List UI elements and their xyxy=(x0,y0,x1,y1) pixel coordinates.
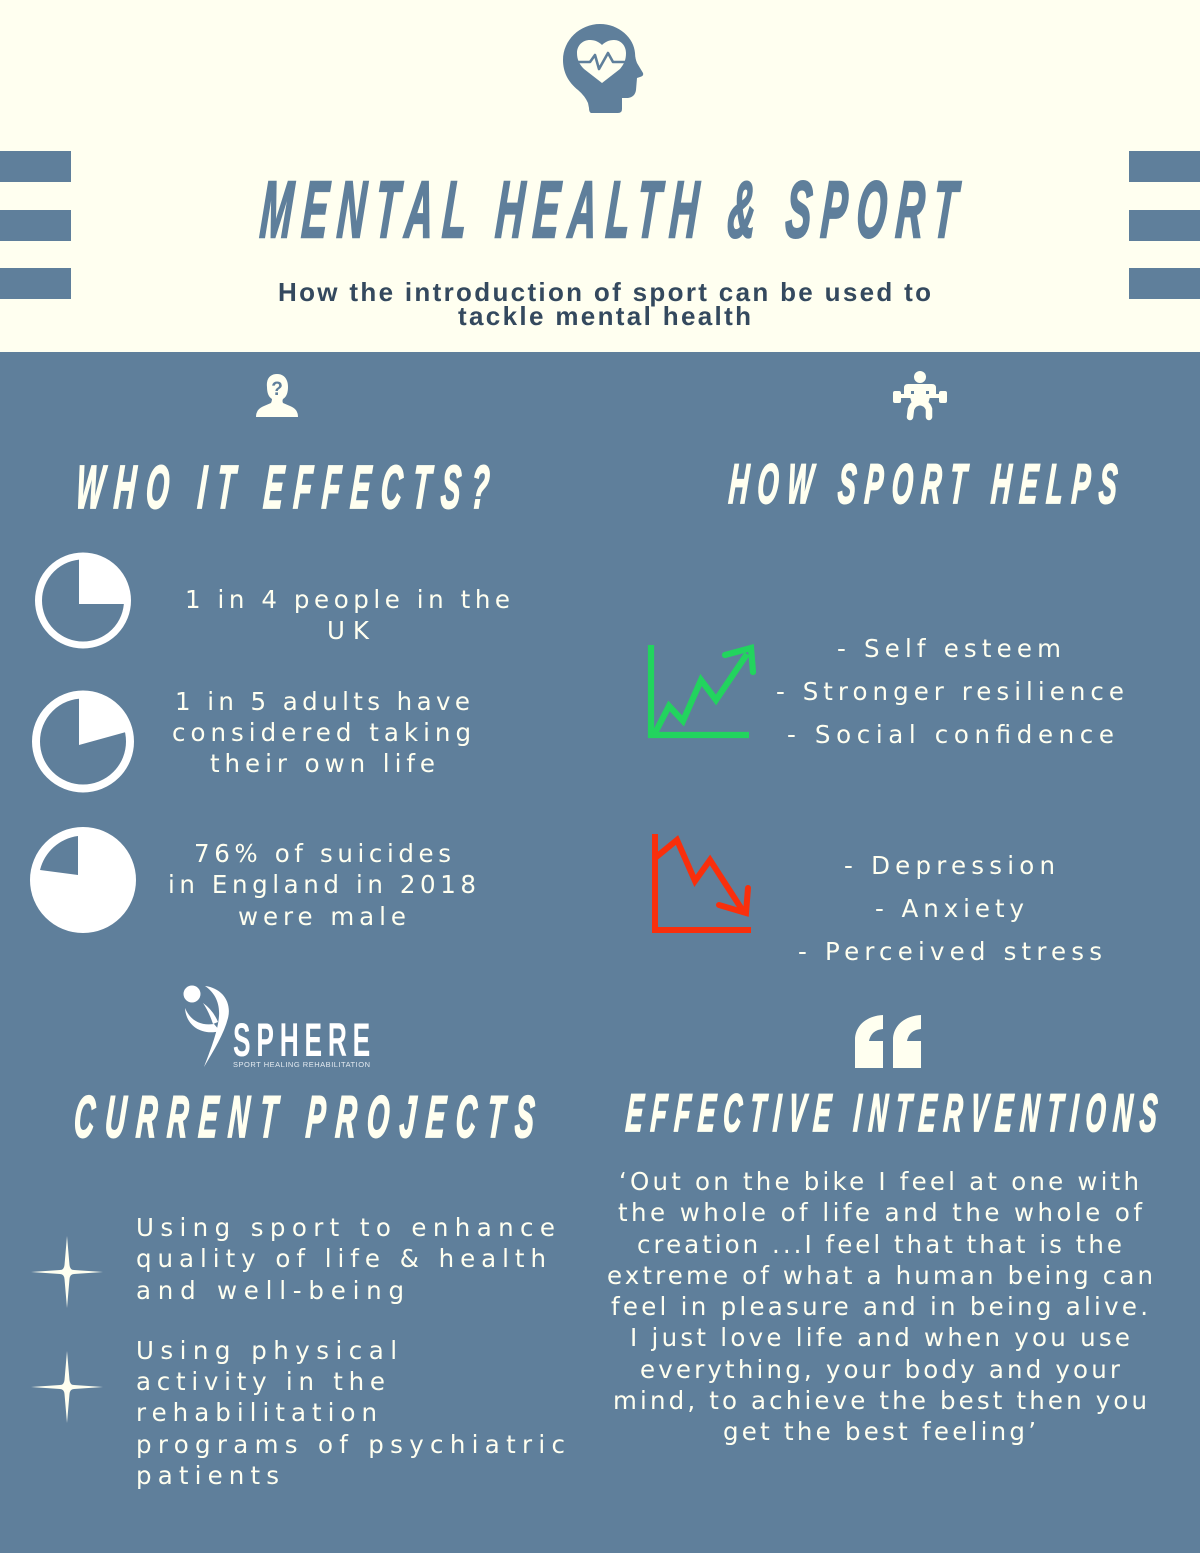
list: reductions xyxy=(798,851,1102,966)
project: rehabilitation xyxy=(136,1336,565,1490)
header panel xyxy=(0,0,1200,352)
project: rehabilitation: patients xyxy=(136,1461,279,1490)
pie: 1 in 5 xyxy=(36,694,130,788)
chart icon: rising green xyxy=(651,645,753,735)
pie: 1 in 4 xyxy=(38,556,128,645)
list: reductions: - Depression xyxy=(844,851,1055,880)
stat: 1 in 5 adults: their own life xyxy=(210,749,435,778)
stat: 76 percent: 76% of suicides xyxy=(194,839,451,868)
project: quality of life: quality of life & health xyxy=(136,1244,546,1273)
icon: head with heart xyxy=(563,24,643,113)
icon: weightlifter xyxy=(893,371,947,417)
list: improvements: - Social confidence xyxy=(787,720,1114,749)
project: rehabilitation: activity in the xyxy=(136,1367,385,1396)
list: improvements: - Stronger resilience xyxy=(776,677,1124,706)
stat: 1 in 5 adults: considered taking xyxy=(172,718,471,747)
heading: how sport helps: HOW SPORT HELPS xyxy=(727,453,1119,516)
quote text: feel in pleasure and in being alive. xyxy=(611,1292,1148,1321)
project: rehabilitation: Using physical xyxy=(136,1336,397,1365)
decorative bars: left xyxy=(0,151,71,299)
quote text: creation ...I feel that that is the xyxy=(637,1230,1122,1259)
stat: 76 percent xyxy=(168,839,476,931)
stat: 1 in 5 adults: 1 in 5 adults have xyxy=(175,687,470,716)
quote text: I just love life and when you use xyxy=(630,1323,1130,1352)
quote text: ‘Out on the bike I feel at one with xyxy=(619,1167,1139,1196)
logo: Sphere xyxy=(184,986,370,1069)
icon: sparkle 1 xyxy=(31,1236,103,1308)
chart icon: falling red xyxy=(655,834,751,930)
quote text xyxy=(607,1167,1153,1446)
quote text: get the best feeling’ xyxy=(723,1417,1036,1446)
heading: effective interventions: EFFECTIVE INTERVENTIONS xyxy=(624,1083,1159,1142)
pie: 76 percent xyxy=(30,827,136,933)
quote text: extreme of what a human being can xyxy=(607,1261,1153,1290)
quote text: the whole of life and the whole of xyxy=(618,1198,1143,1227)
decorative bars: right xyxy=(1129,151,1200,299)
quote text: mind, to achieve the best then you xyxy=(613,1386,1147,1415)
title: MENTAL HEALTH & SPORT xyxy=(258,166,963,255)
project: quality of life xyxy=(136,1213,555,1305)
icon: person with question mark xyxy=(256,374,298,417)
subtitle: tackle mental health xyxy=(458,301,751,331)
icon: person with question mark: ? xyxy=(271,379,283,400)
project: rehabilitation: programs of psychiatric xyxy=(136,1430,565,1459)
logo: Sphere: SPORT HEALING REHABILITATION xyxy=(233,1060,370,1069)
project: quality of life: and well-being xyxy=(136,1276,404,1305)
project: rehabilitation: rehabilitation xyxy=(136,1398,377,1427)
list: improvements xyxy=(776,634,1124,749)
quote text: everything, your body and your xyxy=(640,1355,1121,1384)
stat: 1 in 4 people xyxy=(185,585,510,645)
subtitle: How the introduction of sport can be used to xyxy=(278,277,931,307)
stat: 1 in 5 adults xyxy=(172,687,471,778)
icon: sparkle 2 xyxy=(31,1351,103,1423)
project: quality of life: Using sport to enhance xyxy=(136,1213,555,1242)
logo: Sphere: SPHERE xyxy=(233,1015,370,1067)
subtitle xyxy=(278,277,931,331)
list: reductions: - Perceived stress xyxy=(798,937,1102,966)
list: reductions: - Anxiety xyxy=(875,894,1024,923)
stat: 76 percent: were male xyxy=(238,902,406,931)
stat: 1 in 4 people: UK xyxy=(327,616,370,645)
stat: 1 in 4 people: 1 in 4 people in the xyxy=(185,585,510,614)
icon: quotation marks xyxy=(855,1015,921,1068)
list: improvements: - Self esteem xyxy=(837,634,1061,663)
heading: who it effects: WHO IT EFFECTS? xyxy=(74,455,492,522)
heading: current projects: CURRENT PROJECTS xyxy=(72,1084,537,1150)
stat: 76 percent: in England in 2018 xyxy=(168,870,476,899)
